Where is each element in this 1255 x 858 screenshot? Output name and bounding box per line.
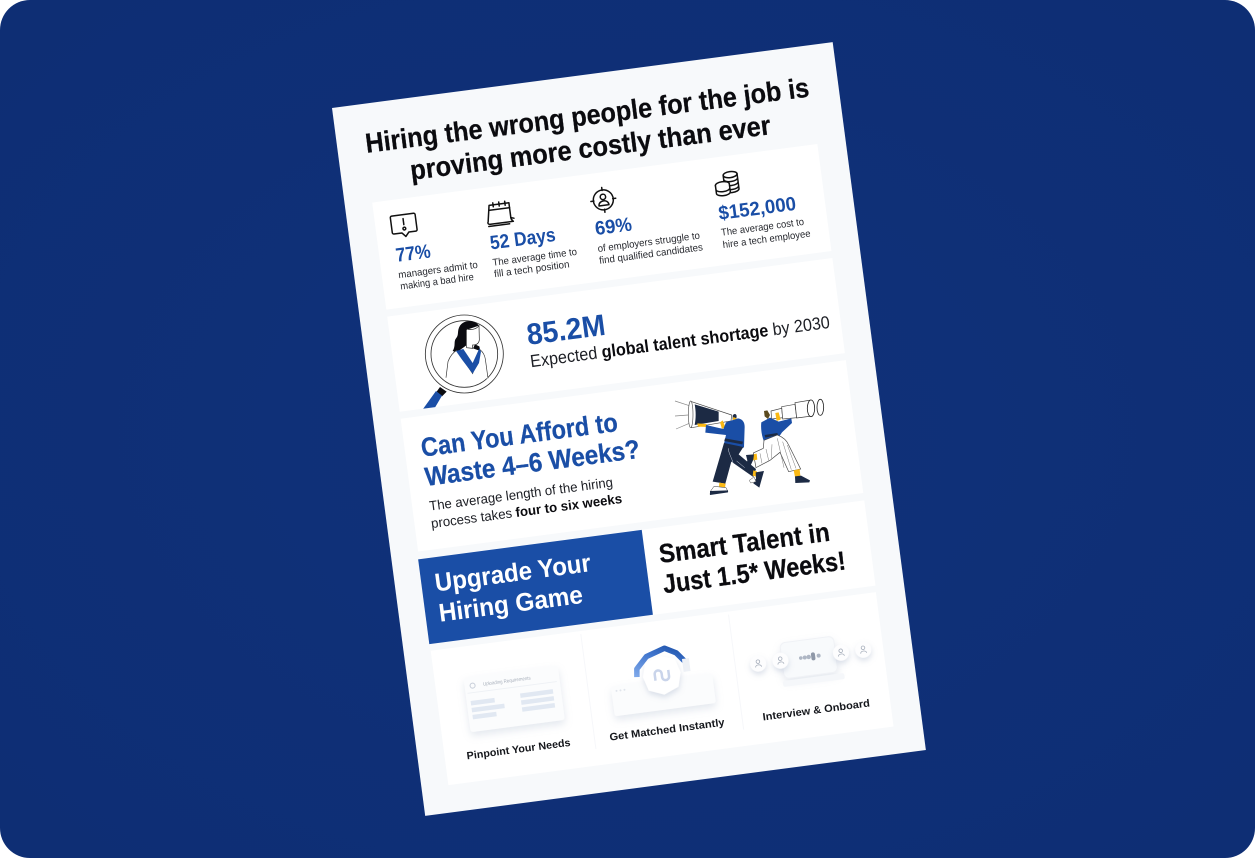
description: [428, 474, 623, 531]
step: interview and onboard: Interview & Onboard: [762, 697, 871, 723]
illustration: recruiters with megaphone and telescope: [675, 399, 824, 495]
panel: key hiring statistics: [372, 144, 831, 310]
icon: target person: [589, 186, 617, 214]
smart talent headline: Just 1.5* Weeks!: [661, 545, 847, 599]
heading: [419, 405, 642, 492]
panel: can you afford to waste: [401, 360, 863, 552]
smart talent headline: [657, 515, 847, 599]
stat: struggling employers: of employers struggle to: [597, 231, 701, 255]
smart talent headline: Smart Talent in: [657, 517, 832, 569]
step: pinpoint your needs: [457, 665, 571, 762]
shortage caption: Expected global talent shortage by 2030: [529, 312, 831, 371]
title: [363, 72, 815, 191]
title: Hiring the wrong people for the job is: [363, 72, 811, 159]
stat: cost per hire: [713, 162, 812, 251]
page sheet: [332, 42, 926, 816]
heading: Can You Afford to: [419, 407, 619, 463]
rotated infographic page: [332, 42, 926, 816]
icon: coin stacks: [714, 171, 740, 197]
stat: bad hires: managers admit to: [398, 260, 479, 281]
stat: cost per hire: The average cost to: [720, 217, 805, 239]
panel: global talent shortage: 85.2M: [525, 309, 607, 352]
icon: magnifying glass with candidate: [423, 314, 504, 409]
icon: calendar: [485, 200, 515, 227]
description: process takes four to six weeks: [430, 491, 623, 531]
stat: days to fill: The average time to: [492, 247, 578, 269]
stat: bad hires: 77%: [394, 240, 432, 267]
stat: days to fill: 52 Days: [489, 224, 557, 254]
card: matching widget: [607, 642, 716, 716]
panel: process steps: [431, 592, 894, 785]
stat: bad hires: making a bad hire: [400, 272, 475, 293]
stat: bad hires: [390, 206, 480, 293]
stat: struggling employers: 69%: [594, 213, 633, 240]
panel: upgrade banner: [418, 500, 875, 644]
step: get matched instantly: Get Matched Instantly: [609, 717, 726, 744]
icon: alert speech bubble: [390, 213, 418, 238]
blue call to action: Hiring Game: [437, 581, 585, 628]
step: get matched instantly: [599, 642, 726, 744]
blue call to action: Upgrade Your: [433, 549, 593, 598]
heading: Waste 4–6 Weeks?: [423, 434, 642, 492]
panel: global talent shortage: [423, 314, 830, 409]
card: uploading requirements: Uploading Requirements: [483, 675, 531, 688]
blue call to action: [418, 530, 653, 644]
stat: struggling employers: find qualified candidates: [599, 242, 704, 267]
stat: days to fill: fill a tech position: [493, 259, 570, 280]
stat: struggling employers: [589, 175, 704, 267]
card: video call: [748, 631, 875, 691]
stat: cost per hire: hire a tech employee: [722, 229, 812, 251]
stat: days to fill: [485, 193, 580, 280]
title: proving more costly than ever: [408, 109, 773, 186]
stat: cost per hire: $152,000: [717, 193, 798, 225]
step: pinpoint your needs: Pinpoint Your Needs: [466, 737, 571, 762]
description: The average length of the hiring: [428, 475, 614, 514]
step: interview and onboard: [748, 631, 879, 724]
